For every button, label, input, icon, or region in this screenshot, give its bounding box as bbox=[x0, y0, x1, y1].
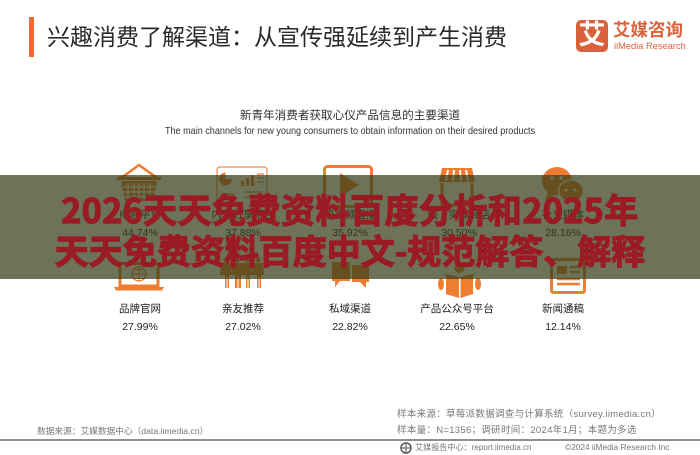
logo english name: iiMedia Research bbox=[614, 41, 686, 51]
panel: channel grid: 线下实体商店 bbox=[428, 209, 490, 221]
sample note bbox=[397, 408, 661, 436]
source note: 数据来源：艾媒数据中心（data.iimedia.cn） bbox=[37, 426, 208, 436]
banner headline bbox=[54, 184, 646, 274]
report center text: 艾媒报告中心：report.iimedia.cn bbox=[415, 443, 532, 452]
panel: channel grid bbox=[114, 164, 586, 333]
sample note: 样本量：N=1356；调研时间：2024年1月；本题为多选 bbox=[397, 425, 637, 436]
panel: channel grid: 22.65% bbox=[439, 321, 475, 333]
icon: laptop globe bbox=[114, 262, 164, 290]
panel: channel grid: 社交媒体 bbox=[542, 209, 584, 221]
panel: channel grid: 产品公众号平台 bbox=[420, 303, 494, 315]
channel: social media bbox=[542, 209, 584, 239]
overlay banner bbox=[0, 175, 700, 279]
panel: channel grid: 新闻通稿 bbox=[542, 303, 584, 315]
panel: channel grid: 28.16% bbox=[545, 227, 581, 239]
icon: content report bbox=[216, 166, 268, 212]
copyright: ©2024 iiMedia Research Inc bbox=[565, 442, 669, 452]
icon: chat bubbles bbox=[542, 167, 583, 200]
panel: channel grid: 27.02% bbox=[225, 321, 261, 333]
icon: shopping basket bbox=[117, 164, 161, 201]
footer rule bbox=[0, 439, 700, 441]
banner headline: 天天免费资料百度中文-规范解答、解释 bbox=[55, 225, 645, 274]
icon: group of people bbox=[220, 258, 264, 288]
footer report link bbox=[400, 442, 532, 454]
panel: channel grid: 37.88% bbox=[225, 227, 261, 239]
icon: video player bbox=[323, 165, 373, 208]
title: 兴趣消费了解渠道：从宣传强延续到产生消费 bbox=[47, 24, 507, 50]
chart heading english: The main channels for new young consumers to obtain information on their desired products bbox=[165, 126, 535, 137]
panel: channel grid: 私域渠道 bbox=[329, 303, 371, 315]
channel: short video bbox=[324, 209, 376, 239]
panel: channel grid: 短视频直播 bbox=[324, 209, 376, 221]
channel: news bbox=[542, 303, 584, 333]
panel: channel grid: 30.50% bbox=[441, 227, 477, 239]
banner headline: 2026天天免费资料百度分析和2025年 bbox=[61, 184, 639, 233]
logo mark: 艾 bbox=[578, 20, 606, 50]
channel: e-commerce bbox=[119, 209, 161, 239]
title accent bar bbox=[29, 17, 34, 57]
icon: storefront bbox=[439, 168, 475, 206]
icon: private chat bbox=[332, 262, 369, 288]
icon: open book bbox=[438, 266, 481, 298]
icon: newspaper bbox=[550, 258, 586, 294]
panel: channel grid: 内容分享平台 bbox=[212, 209, 274, 221]
logo: iiMedia Research bbox=[576, 20, 686, 52]
panel: channel grid: 22.82% bbox=[332, 321, 368, 333]
sample note: 样本来源：草莓派数据调查与计算系统（survey.iimedia.cn） bbox=[397, 409, 661, 420]
panel: channel grid: 35.92% bbox=[332, 227, 368, 239]
channel: friends and family bbox=[222, 303, 264, 333]
panel: channel grid: 品牌官网 bbox=[119, 303, 161, 315]
panel: channel grid: 12.14% bbox=[545, 321, 581, 333]
panel: channel grid: 44.74% bbox=[122, 227, 158, 239]
channel: brand website bbox=[119, 303, 161, 333]
panel: channel grid: 电商平台 bbox=[119, 209, 161, 221]
panel: channel grid: 亲友推荐 bbox=[222, 303, 264, 315]
icon: report globe bbox=[400, 442, 412, 454]
logo chinese name: 艾媒咨询 bbox=[613, 20, 683, 40]
channel: offline store bbox=[428, 209, 490, 239]
panel: channel grid: 27.99% bbox=[122, 321, 158, 333]
channel: public accounts bbox=[420, 303, 494, 333]
channel: content sharing bbox=[212, 209, 274, 239]
channel: private domain bbox=[329, 303, 371, 333]
chart heading chinese: 新青年消费者获取心仪产品信息的主要渠道 bbox=[240, 109, 460, 122]
